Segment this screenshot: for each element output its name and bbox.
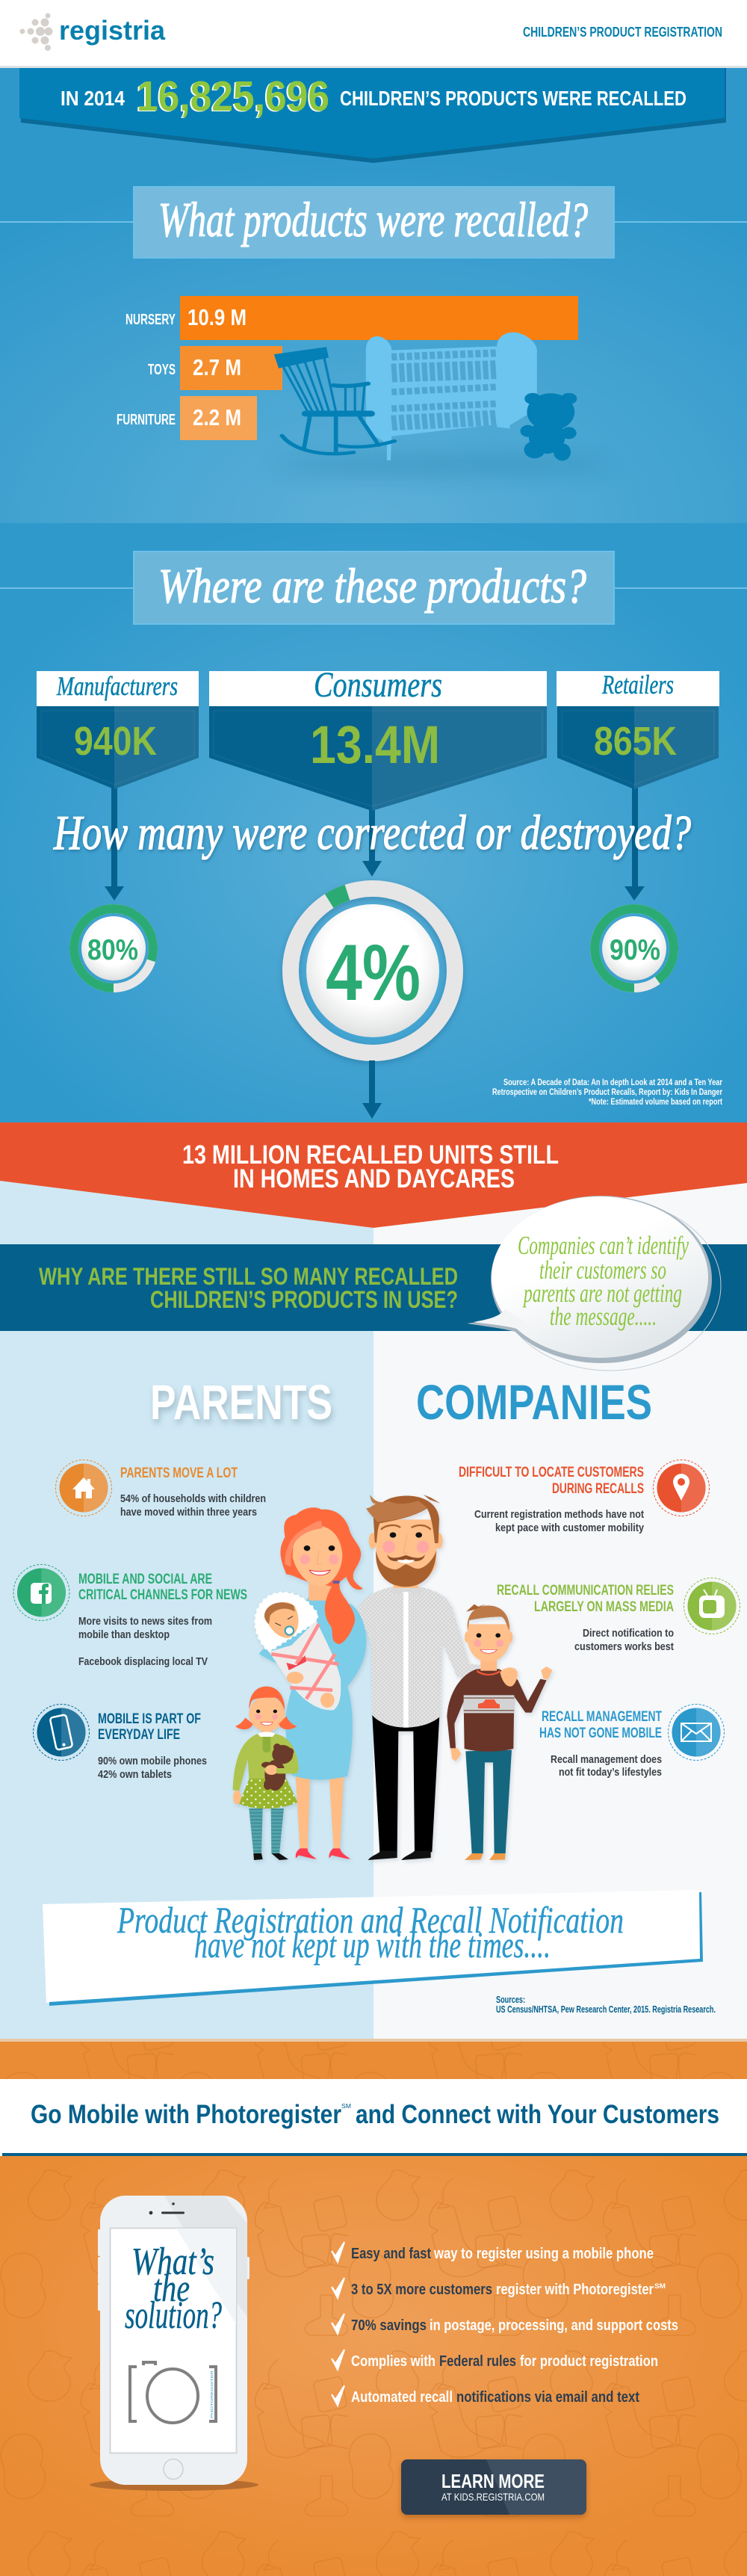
donut: 80%: 80% [87,934,138,966]
text block: recall management [539,1709,662,1779]
text block: mobile everyday life: 42% own tablets [98,1768,172,1781]
connect headline: SM [341,2103,351,2110]
item: more customers: 3 to 5X more customers [351,2282,492,2298]
logo: registria [19,13,166,51]
heading panel: what products were recalled: What products were recalled? [158,193,588,247]
phone text: what's the solution: the [153,2267,190,2310]
bar: furniture: FURNITURE [117,412,176,428]
question band: WHY ARE THERE STILL SO MANY RECALLED [39,1263,458,1290]
item: federal rules [332,2350,658,2370]
text block: recall management: not fit today’s lifestyles [559,1766,662,1779]
split background: parents side [0,1122,374,2039]
logo: registria: registria [59,15,166,46]
illustration: rocking chair [274,347,394,454]
ribbon text: in 2014: IN 2014 [61,87,125,110]
text block: recall management: RECALL MANAGEMENT [542,1709,662,1725]
bar: furniture: 2.2 M [193,404,241,430]
text block: recall communication: LARGELY ON MASS MEDIA [534,1599,674,1615]
learn more button [401,2459,586,2515]
item: easy and fast: way to register using a mobile phone [433,2246,654,2262]
text block: mobile and social: Facebook displacing local TV [78,1655,208,1668]
text block: parents move a lot: 54% of households with children [120,1492,266,1505]
card: retailers: 865K [594,719,677,764]
figure: father [341,1495,495,1860]
text block: recall management: Recall management does [551,1753,662,1766]
item: easy and fast: Easy and fast [351,2246,431,2262]
arrow: consumers down [362,807,382,877]
text block: mobile everyday life: 90% own mobile phones [98,1755,207,1767]
learn more button: AT KIDS.REGISTRIA.COM [441,2491,545,2503]
icon: television [684,1578,740,1634]
bar chart: recalled products [117,296,578,440]
furniture floor shadow [269,454,613,475]
donut: 90%: 90% [610,934,660,966]
donut: 4%: 4% [326,927,421,1017]
checklist [332,2242,678,2406]
icon: camera [130,2362,216,2423]
phone text: what's the solution [125,2240,222,2337]
donut: 4% [291,889,455,1053]
text block: recall communication: Direct notification to [583,1627,674,1640]
bar: nursery: NURSERY [125,312,176,328]
text block: parents move a lot: have moved within three years [120,1506,257,1519]
heading panel: where are these products: Where are these products? [158,559,586,614]
item: savings: 70% savings [351,2317,427,2334]
item: savings: in postage, processing, and support costs [430,2317,678,2334]
item: federal rules: Complies with [351,2353,436,2370]
question band: CHILDREN’S PRODUCTS IN USE? [150,1286,458,1313]
sources note: Sources: [496,1995,525,2005]
bar: toys [148,346,282,390]
split background: companies side [374,1122,747,2039]
item: automated recall: notifications via email and text [456,2389,639,2406]
arrow: manufacturers down [105,785,124,901]
speech bubble: the message..... [550,1302,657,1331]
phone illustration [98,2196,249,2485]
speech bubble [467,1196,721,1371]
bar: furniture [117,396,257,440]
orange strip with toy pattern [0,2039,747,2079]
item: automated recall: Automated recall [351,2389,453,2406]
text block: recall communication: RECALL COMMUNICATION RELIES [497,1583,674,1599]
ribbon number: 16,825,696 [137,72,329,120]
icon: envelope [668,1704,725,1761]
text block: difficult to locate: kept pace with customer mobility [495,1522,645,1534]
card: manufacturers: 940K [74,719,157,764]
text block: recall communication [497,1583,674,1653]
arrow: consumers to banner [362,1060,382,1119]
text block: parents move a lot: PARENTS MOVE A LOT [120,1465,238,1481]
card: consumers: Consumers [314,665,442,705]
card: retailers [557,670,719,789]
connect headline [0,2079,747,2153]
blue section: where products are background [0,523,747,1122]
arrow: retailers down [624,785,645,901]
icon: location pin [653,1460,710,1516]
callout: product registration slanted box [43,1890,703,2006]
figure: boy [447,1604,552,1860]
source note [492,1077,722,1107]
text block: mobile and social [78,1572,247,1668]
top ribbon banner [19,68,726,163]
red banner [0,1122,747,1228]
icon: home [55,1460,112,1516]
bar: toys: TOYS [148,362,176,378]
item: more customers: SM [654,2282,666,2290]
icon: facebook [13,1565,69,1620]
text block: mobile and social: More visits to news sites from [78,1615,212,1628]
heading: parents: PARENTS [150,1374,332,1430]
bar: nursery [125,296,578,340]
figure: girl with teddy [233,1687,299,1860]
card: manufacturers [37,671,199,789]
text block: difficult to locate: DURING RECALLS [552,1481,644,1497]
text block: difficult to locate: DIFFICULT TO LOCATE CUSTOMERS [459,1465,644,1480]
speech bubble: their customers so [539,1255,666,1285]
red banner: 13 MILLION RECALLED UNITS STILL [182,1140,559,1170]
card: consumers [209,665,547,811]
donut: 90% [595,909,674,988]
learn more button: LEARN MORE [441,2470,545,2492]
item: federal rules: for product registration [520,2353,658,2370]
text block: mobile everyday life [98,1711,207,1781]
icon: mobile phone [33,1704,90,1761]
donut: 80% [74,909,153,988]
item: easy and fast [332,2242,654,2262]
illustration: crib [366,333,537,460]
orange solution panel [0,2153,747,2576]
phone shadow [90,2479,258,2491]
heading: companies: COMPANIES [416,1374,652,1430]
phone text: what's the solution: What’s [131,2240,214,2283]
card: consumers: 13.4M [310,716,440,775]
text block: recall management: HAS NOT GONE MOBILE [539,1726,662,1741]
bar: nursery: 10.9 M [187,304,247,330]
text block: mobile and social: MOBILE AND SOCIAL ARE [78,1572,212,1587]
figure: mother with baby [255,1507,366,1859]
bar: toys: 2.7 M [193,354,241,380]
blue section: recalled products background [0,68,747,523]
question band [0,1244,747,1331]
item: automated recall [332,2385,639,2406]
card: retailers: Retailers [601,670,674,699]
text block: mobile and social: mobile than desktop [78,1628,170,1641]
text block: mobile everyday life: EVERYDAY LIFE [98,1727,180,1743]
red banner: IN HOMES AND DAYCARES [233,1164,515,1193]
item: more customers: register with Photoregister [496,2282,654,2298]
callout: product registration slanted box: have not kept up with the times.... [194,1924,551,1965]
text block: mobile everyday life: MOBILE IS PART OF [98,1711,201,1727]
item: savings [332,2314,678,2334]
text block: parents move a lot [120,1465,266,1519]
text block: difficult to locate [459,1465,645,1534]
item: federal rules: Federal rules [439,2353,516,2370]
text block: difficult to locate: Current registration methods have not [474,1508,644,1521]
illustration: family [233,1495,552,1860]
phone text: what's the solution: solution? [125,2294,222,2337]
text block: mobile and social: CRITICAL CHANNELS FOR NEWS [78,1587,247,1603]
icon: camera: PHOTOREGISTER [210,2370,214,2418]
heading panel: what products were recalled [0,187,747,258]
item: more customers [332,2278,666,2298]
connect headline: Go Mobile with Photoregister [31,2100,341,2129]
sources note [496,1995,716,2015]
header bar [0,0,747,68]
card: manufacturers: Manufacturers [56,671,178,701]
text block: recall communication: customers works best [574,1640,674,1653]
illustration: teddy bear [520,393,577,460]
heading panel: where are these products [0,552,747,624]
